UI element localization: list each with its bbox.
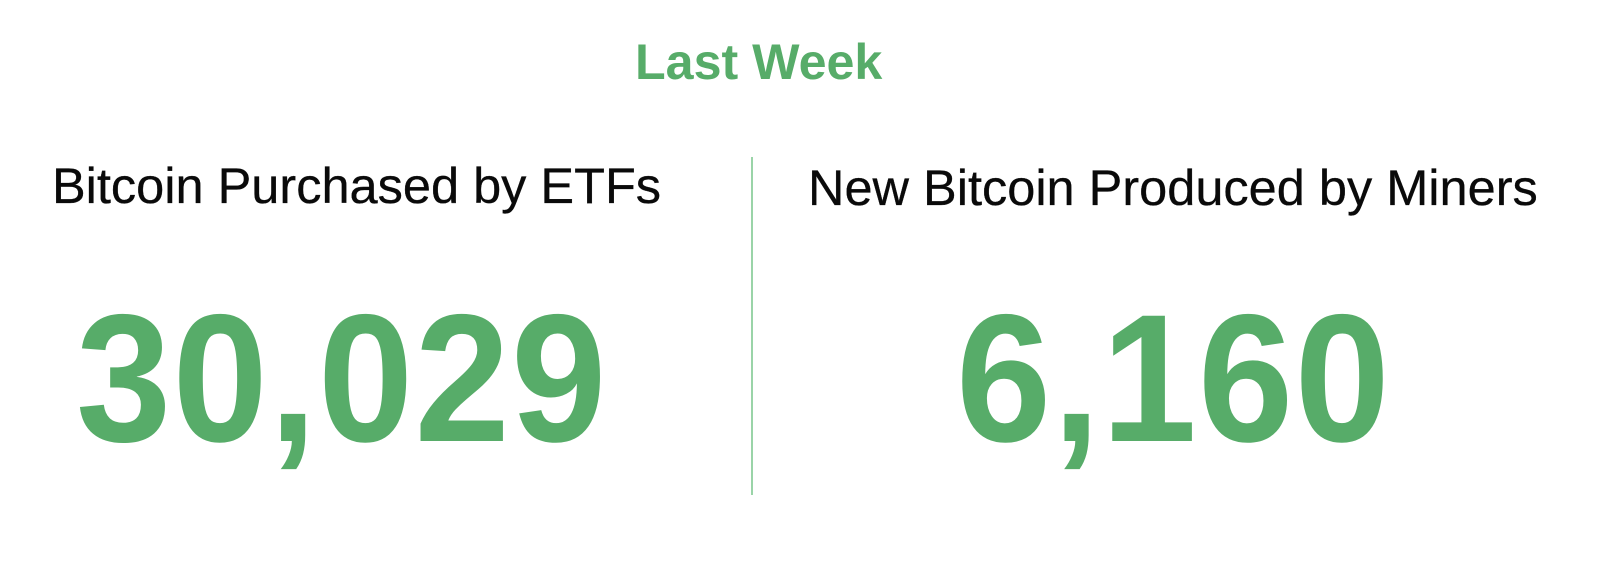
value: 30,029: 30,029 (76, 276, 607, 480)
label: Bitcoin purchased by ETFs: Bitcoin Purchased by ETFs (52, 157, 661, 214)
title: Last Week (635, 34, 882, 90)
label: New Bitcoin produced by miners: New Bitcoin Produced by Miners (808, 159, 1538, 216)
divider (751, 157, 753, 495)
value: 6,160: 6,160 (956, 276, 1391, 480)
